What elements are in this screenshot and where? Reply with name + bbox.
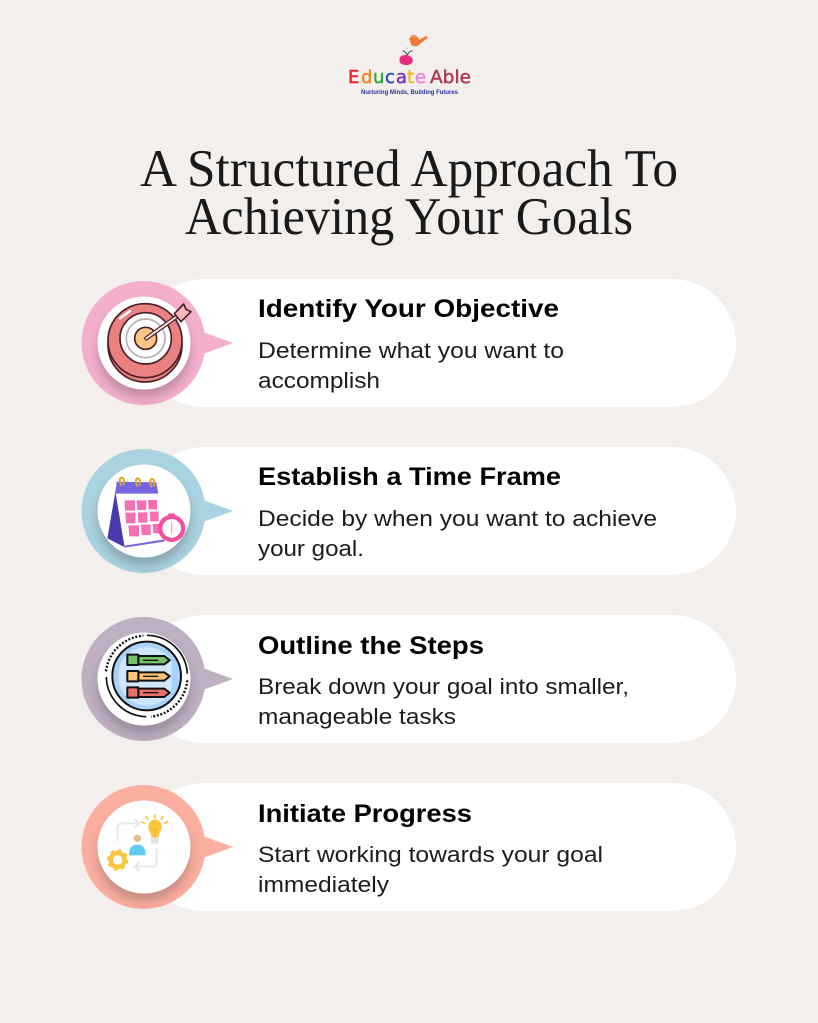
description <box>258 506 657 561</box>
icon: watering can <box>399 35 428 65</box>
logo wordmark second word: Able <box>430 67 471 88</box>
description: manageable tasks <box>258 704 456 729</box>
panel: establish a time frame <box>82 447 736 575</box>
card background <box>140 615 736 743</box>
panel: outline the steps <box>82 615 736 743</box>
description: Start working towards your goal <box>258 842 603 867</box>
description <box>258 674 629 729</box>
heading: Initiate Progress <box>258 800 472 828</box>
heading: Outline the Steps <box>258 632 484 660</box>
heading: Establish a Time Frame <box>258 463 561 491</box>
logo wordmark: d <box>361 67 372 88</box>
card background <box>140 279 736 407</box>
description: your goal. <box>258 536 364 561</box>
title <box>140 140 678 246</box>
badge: purple circle with pointer <box>82 617 233 741</box>
icon: progress cycle <box>108 815 168 871</box>
title: Achieving Your Goals <box>185 188 633 246</box>
heading: Identify Your Objective <box>258 295 559 323</box>
logo wordmark: t <box>407 67 414 88</box>
logo wordmark: c <box>385 67 395 88</box>
badge: blue circle with pointer <box>82 449 233 573</box>
title: A Structured Approach To <box>140 140 678 198</box>
icon: task list <box>106 635 187 717</box>
logo tagline: Nurturing Minds, Building Futures <box>361 89 458 96</box>
panel: identify your objective <box>82 279 736 407</box>
logo wordmark: E <box>348 67 359 88</box>
card background <box>140 447 736 575</box>
card background <box>140 783 736 911</box>
description: Break down your goal into smaller, <box>258 674 629 699</box>
description: Decide by when you want to achieve <box>258 506 657 531</box>
description: Determine what you want to <box>258 338 564 363</box>
icon: target with arrow <box>108 304 191 382</box>
panel: initiate progress <box>82 783 736 911</box>
icon: calendar with clock <box>107 478 185 548</box>
badge: pink circle with pointer <box>82 281 233 405</box>
description <box>258 338 564 393</box>
logo wordmark: u <box>373 67 384 88</box>
logo wordmark: a <box>396 67 407 88</box>
description: immediately <box>258 872 390 897</box>
description <box>258 842 603 897</box>
logo wordmark: e <box>415 67 426 88</box>
description: accomplish <box>258 368 380 393</box>
badge: salmon circle with pointer <box>82 785 233 909</box>
logo <box>348 35 471 96</box>
